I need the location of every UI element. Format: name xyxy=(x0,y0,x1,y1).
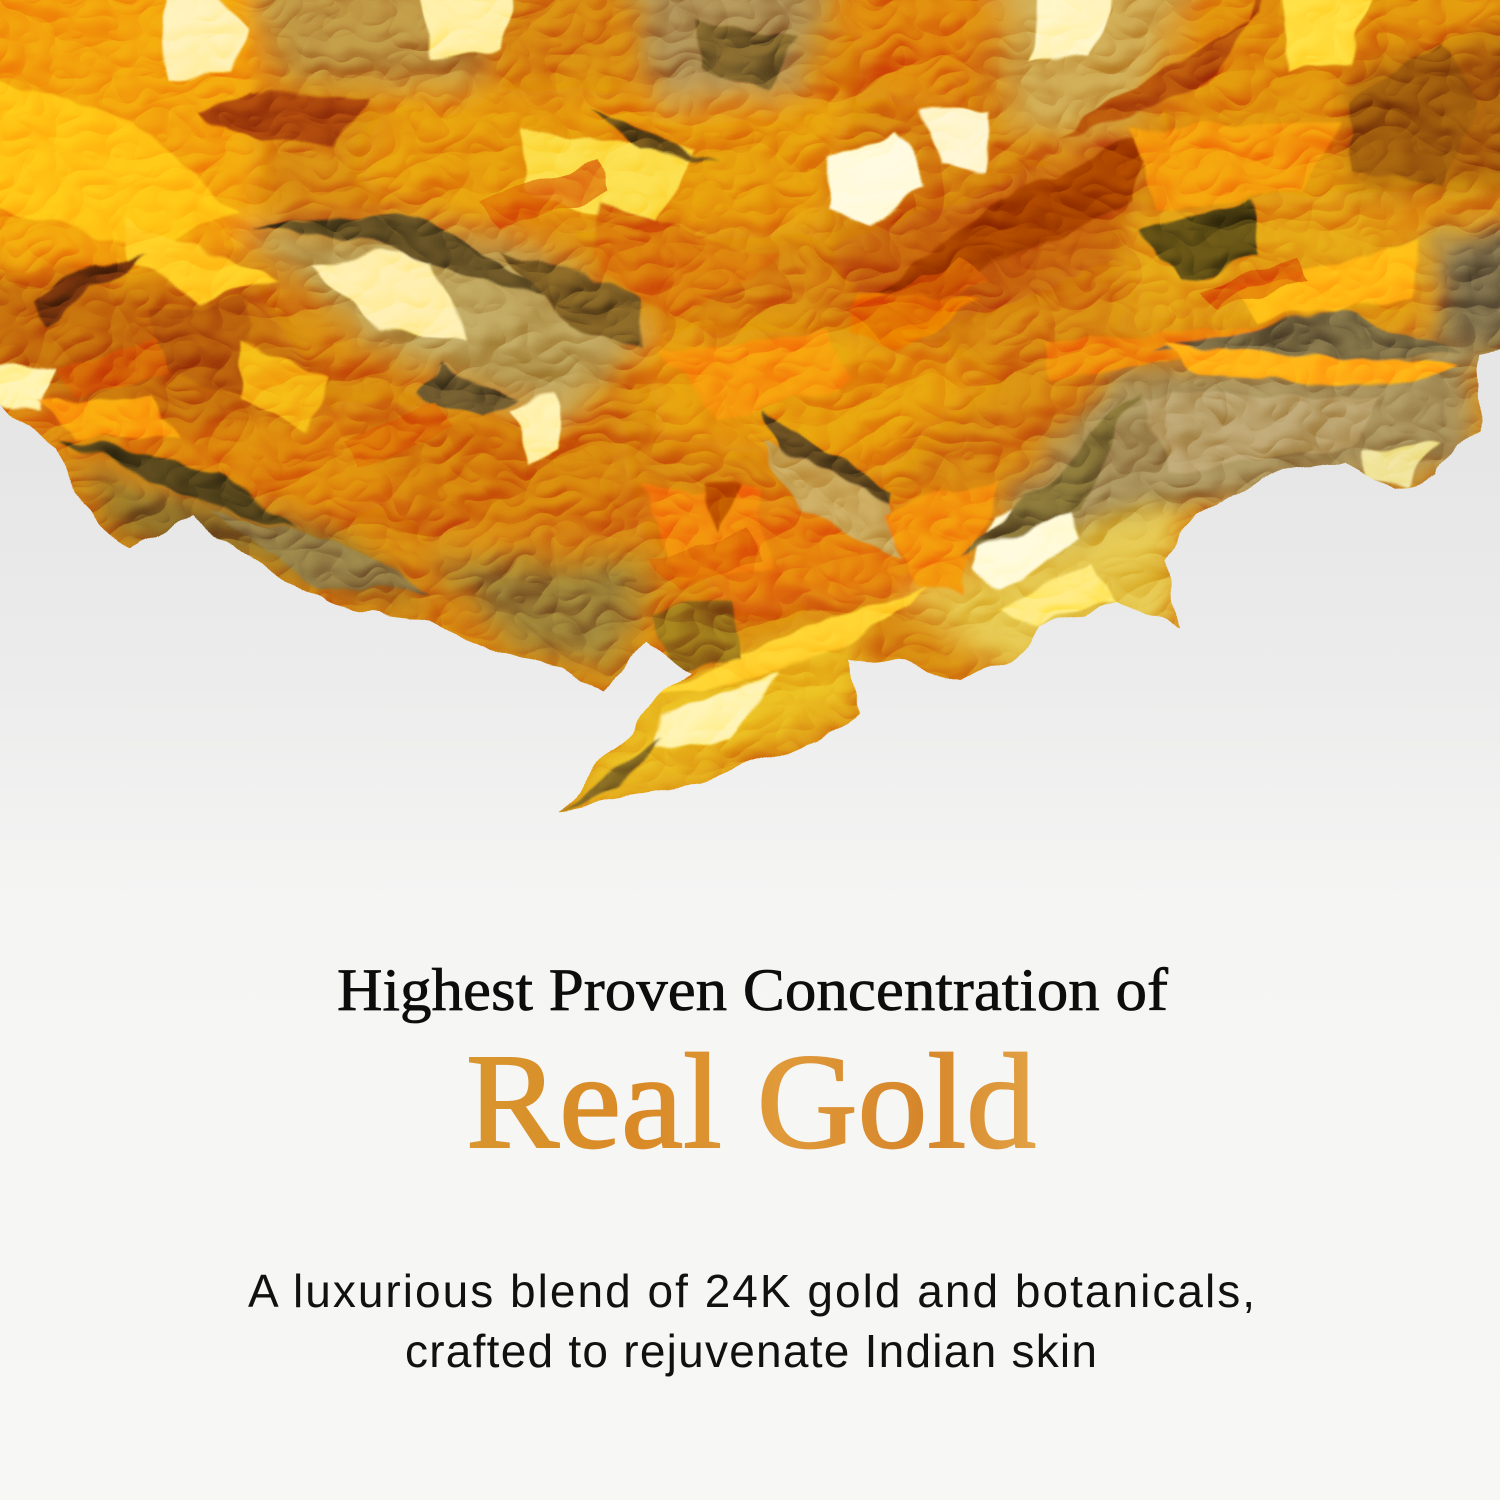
orange streaks xyxy=(60,160,1310,590)
description line 1: A luxurious blend of 24K gold and botanicals, xyxy=(248,1265,1255,1317)
crumple texture xyxy=(0,0,1500,900)
gold headline: Real Gold xyxy=(466,1027,1036,1177)
gold foil image xyxy=(0,0,1500,900)
heading: Highest Proven Concentration of xyxy=(337,957,1168,1023)
description line 2: crafted to rejuvenate Indian skin xyxy=(405,1325,1097,1377)
